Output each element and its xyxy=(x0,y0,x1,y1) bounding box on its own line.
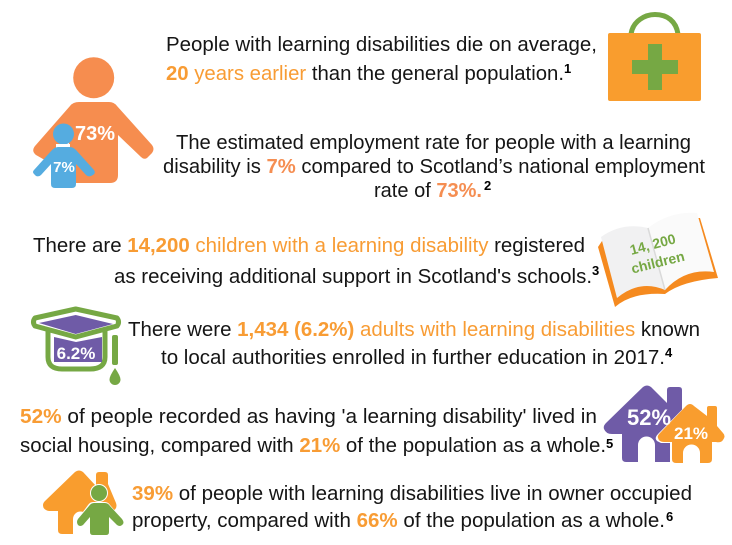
text: further education xyxy=(128,319,700,369)
text: social housing xyxy=(20,406,613,457)
icon: medical case xyxy=(608,14,701,101)
text: children in schools: 3 xyxy=(592,263,599,278)
text: owner occupied: property, compared with 66% of the population as a whole. xyxy=(132,510,665,532)
text: social housing: 52% of people recorded as having 'a learning disability' lived in xyxy=(20,406,597,428)
text: further education: 4 xyxy=(665,345,673,360)
icon: houses: 52% xyxy=(627,405,671,430)
text: owner occupied: 39% of people with learning disabilities live in owner occupied xyxy=(132,483,692,505)
icon: open book: children xyxy=(629,248,686,276)
text: further education: There were 1,434 (6.2%) adults with learning disabilities known xyxy=(128,319,700,341)
text: employment rate: disability is 7% compared to Scotland’s national employment xyxy=(163,156,705,178)
text: life expectancy xyxy=(166,34,597,85)
icon: house and person xyxy=(43,470,124,535)
icon: graduation cap: 6.2% xyxy=(57,344,95,363)
text: owner occupied: 6 xyxy=(666,509,673,524)
text: employment rate: 2 xyxy=(484,178,491,193)
icon: houses: 21% xyxy=(674,424,708,443)
text: life expectancy: 20 years earlier than the general population. xyxy=(166,63,564,85)
text: owner occupied xyxy=(132,483,692,532)
text: employment rate: rate of 73%. xyxy=(374,180,482,202)
icon: open book xyxy=(598,213,718,307)
text: social housing: social housing, compared with 21% of the population as a whole. xyxy=(20,435,606,457)
text: employment rate xyxy=(163,132,705,202)
icon: graduation cap xyxy=(34,309,120,385)
text: children in schools xyxy=(33,235,599,288)
text: further education: to local authorities enrolled in further education in 2017. xyxy=(161,347,665,369)
icon: adult and child: 7% xyxy=(53,159,75,176)
icon: adult and child xyxy=(33,57,154,188)
text: children in schools: There are 14,200 children with a learning disability registered xyxy=(33,235,585,257)
text: life expectancy: 1 xyxy=(564,61,571,76)
icon: houses xyxy=(604,386,726,465)
text: children in schools: as receiving additional support in Scotland's schools. xyxy=(114,266,592,288)
icon: open book: 14, 200 xyxy=(628,230,678,258)
text: social housing: 5 xyxy=(606,436,613,451)
text: employment rate: The estimated employment rate for people with a learning xyxy=(176,132,691,154)
icon: adult and child: 73% xyxy=(75,123,115,145)
text: life expectancy: People with learning disabilities die on average, xyxy=(166,34,597,56)
